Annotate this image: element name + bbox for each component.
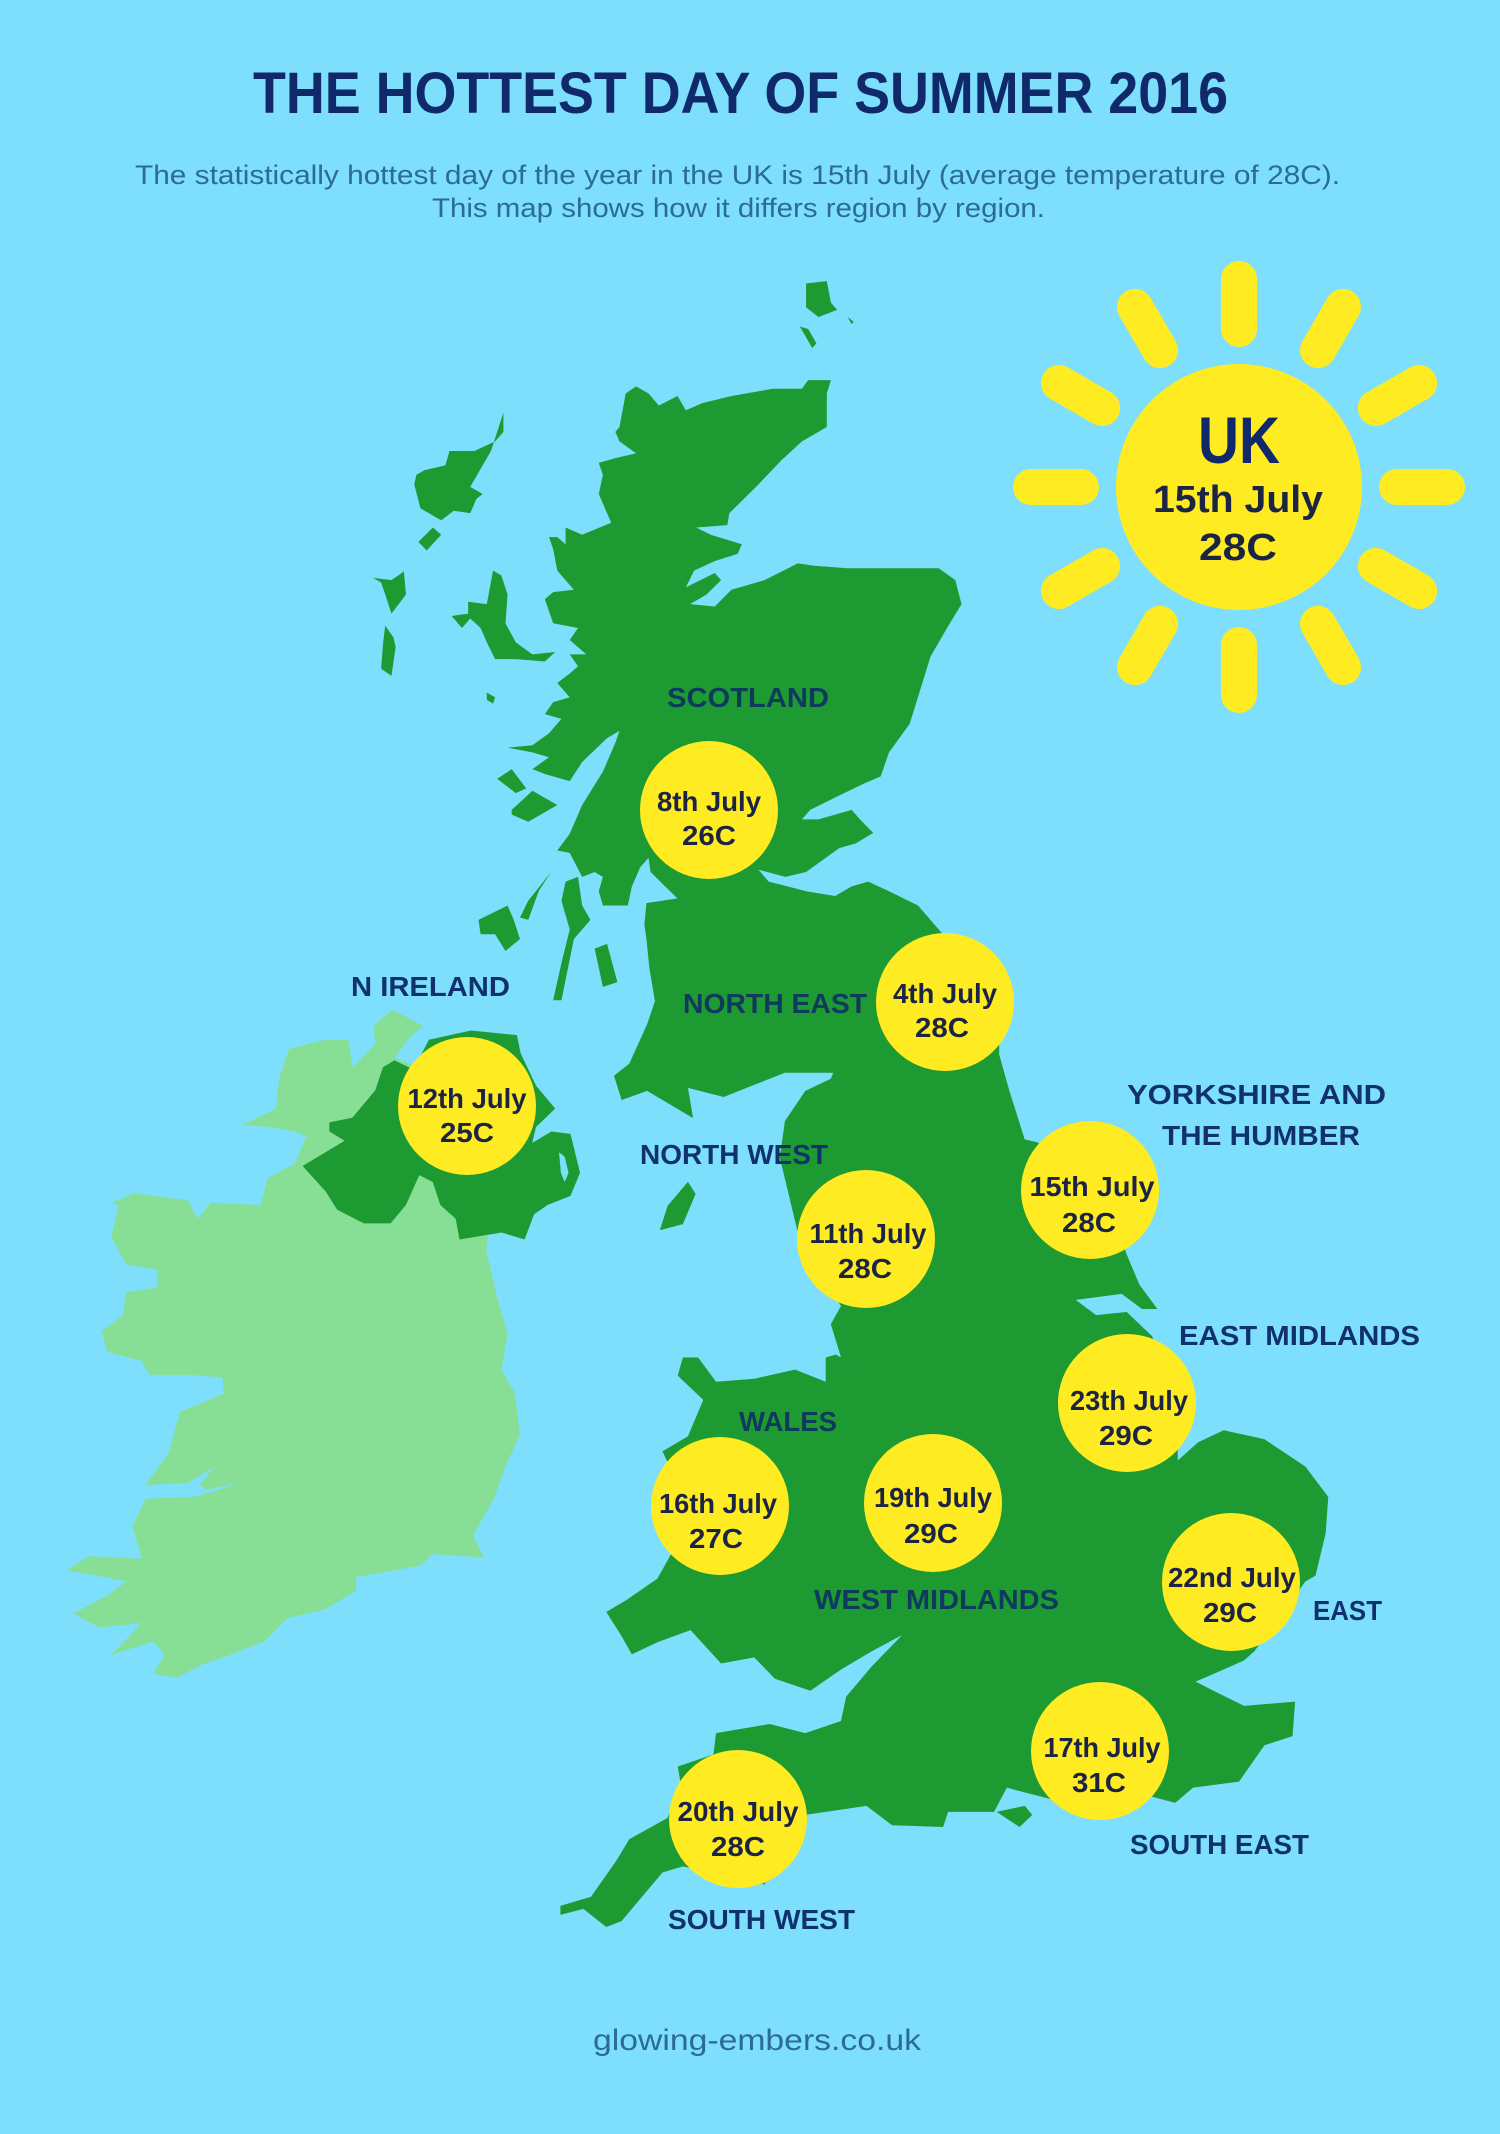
footer source: glowing-embers.co.uk	[593, 2024, 922, 2057]
map: Northern Ireland	[303, 1031, 580, 1239]
map: Isle of Man	[660, 1182, 696, 1230]
title: THE HOTTEST DAY OF SUMMER 2016	[253, 61, 1228, 126]
badge: South East: 17th July	[1044, 1732, 1161, 1763]
badge: North East	[876, 933, 1014, 1071]
badge: East Midlands: 29C	[1099, 1420, 1153, 1451]
badge: Northern Ireland: 25C	[440, 1117, 494, 1148]
map: Republic of Ireland	[67, 1010, 520, 1678]
region label: North East: NORTH EAST	[683, 988, 867, 1019]
badge: North West: 11th July	[810, 1218, 927, 1249]
badge: South East	[1031, 1682, 1169, 1820]
region label: East: EAST	[1313, 1595, 1382, 1626]
badge: North East: 4th July	[893, 978, 997, 1009]
badge: Northern Ireland	[398, 1037, 536, 1175]
badge: East Midlands: 23th July	[1070, 1385, 1188, 1416]
badge: West Midlands	[864, 1434, 1002, 1572]
badge: East: 29C	[1203, 1597, 1257, 1628]
badge: Northern Ireland: 12th July	[408, 1083, 527, 1114]
badge: Scotland	[640, 741, 778, 879]
badge: North East: 28C	[915, 1012, 969, 1043]
subtitle text block: The statistically hottest day of the year in the UK is 15th July (average temperature of 28C).	[135, 160, 1340, 190]
region label: N Ireland: N IRELAND	[351, 971, 510, 1002]
map: Isle of Wight	[997, 1806, 1032, 1827]
badge: East Midlands	[1058, 1334, 1196, 1472]
badge: Yorkshire: 15th July	[1030, 1171, 1155, 1202]
subtitle text block: This map shows how it differs region by region.	[432, 193, 1045, 223]
badge: Scotland: 26C	[682, 820, 736, 851]
badge: South West: 20th July	[678, 1796, 799, 1827]
region label: Scotland: SCOTLAND	[667, 682, 829, 713]
badge: South East: 31C	[1072, 1767, 1126, 1798]
map: Scottish islands	[373, 281, 854, 1000]
icon: sun with UK summary	[1031, 279, 1447, 695]
badge: Yorkshire	[1021, 1121, 1159, 1259]
badge: South West: 28C	[711, 1831, 765, 1862]
icon: sun with UK summary: 15th July	[1153, 479, 1323, 521]
region label: Yorkshire and the Humber	[1127, 1079, 1386, 1151]
badge: North West: 28C	[838, 1253, 892, 1284]
subtitle text block	[135, 160, 1340, 223]
badge: North West	[797, 1170, 935, 1308]
badge: West Midlands: 29C	[904, 1518, 958, 1549]
badge: South West	[669, 1750, 807, 1888]
region label: East Midlands: EAST MIDLANDS	[1179, 1320, 1420, 1351]
icon: sun with UK summary: 28C	[1199, 527, 1277, 569]
badge: West Midlands: 19th July	[874, 1482, 992, 1513]
region label: South East: SOUTH EAST	[1130, 1829, 1309, 1860]
badge: Wales	[651, 1437, 789, 1575]
map: Scotland	[373, 281, 1000, 1000]
badge: Yorkshire: 28C	[1062, 1207, 1116, 1238]
region label: North West: NORTH WEST	[640, 1139, 828, 1170]
badge: East: 22nd July	[1168, 1562, 1296, 1593]
icon: sun with UK summary: UK	[1198, 403, 1280, 477]
region label: Yorkshire and the Humber: THE HUMBER	[1162, 1120, 1360, 1151]
map: England and Wales	[560, 994, 1328, 1927]
badge: Wales: 16th July	[659, 1488, 777, 1519]
region label: Wales: WALES	[739, 1406, 837, 1437]
region label: West Midlands: WEST MIDLANDS	[814, 1584, 1059, 1615]
badge: East	[1162, 1513, 1300, 1651]
badge: Scotland: 8th July	[657, 786, 761, 817]
region label: South West: SOUTH WEST	[668, 1904, 855, 1935]
region label: Yorkshire and the Humber: YORKSHIRE AND	[1127, 1079, 1386, 1110]
badge: Wales: 27C	[689, 1523, 743, 1554]
